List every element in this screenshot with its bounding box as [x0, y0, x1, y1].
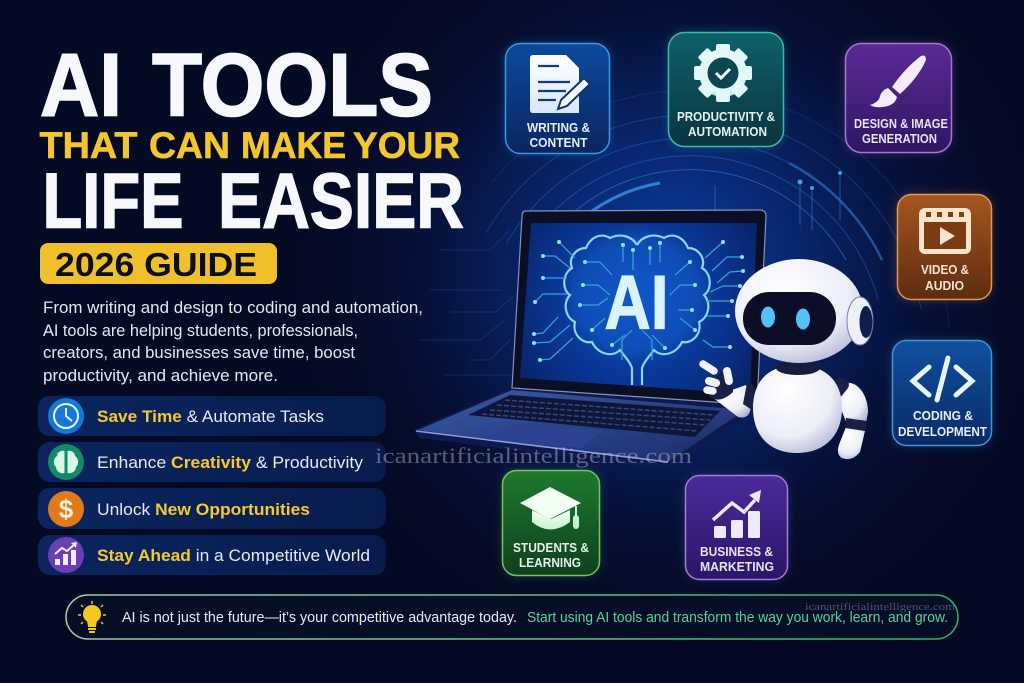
intro paragraph: productivity, and achieve more.: [43, 366, 278, 385]
icon: clock: [48, 398, 84, 434]
card: coding and development: [892, 340, 992, 446]
watermark: icanartificialintelligence.com: [375, 443, 692, 468]
robot pointing arm: [703, 364, 755, 418]
benefit row: new opportunities: [38, 488, 386, 529]
card: video and audio: AUDIO: [925, 278, 964, 293]
intro paragraph: AI tools are helping students, professionals,: [43, 321, 358, 340]
card: writing and content: [505, 43, 610, 154]
card: productivity and automation: AUTOMATION: [688, 124, 767, 139]
badge: 2026 guide: 2026 GUIDE: [55, 246, 257, 283]
card: students and learning: LEARNING: [519, 555, 581, 570]
bottom banner: AI is not just the future—it’s your competitive advantage today.: [122, 610, 517, 626]
title word: TOOLS: TOOLS: [152, 34, 433, 134]
card: business and marketing: MARKETING: [700, 559, 774, 574]
card: design and image generation: DESIGN & IMAGE: [854, 116, 948, 131]
title line: life easier: EASIER: [218, 156, 464, 244]
card: productivity and automation: [668, 32, 784, 147]
intro paragraph: creators, and businesses save time, boost: [43, 343, 355, 362]
brain circuit graphic: AI: [604, 260, 668, 346]
icon: document and pencil: [530, 55, 590, 113]
bottom banner: [66, 595, 958, 639]
card: students and learning: [502, 470, 600, 576]
benefit row: enhance creativity: [38, 442, 386, 482]
icon: dollar: $: [59, 494, 74, 524]
card: coding and development: DEVELOPMENT: [898, 424, 987, 439]
card: video and audio: VIDEO &: [921, 262, 969, 277]
robot body: [753, 361, 842, 453]
small watermark: icanartificialintelligence.com: [805, 601, 956, 613]
laptop screen: [512, 210, 766, 405]
icon: code brackets: [913, 358, 972, 400]
intro paragraph: [43, 298, 423, 385]
benefit row: new opportunities: Unlock New Opportunities: [97, 500, 310, 519]
card: writing and content: CONTENT: [530, 135, 588, 150]
title line: life easier: [42, 156, 464, 244]
card: coding and development: CODING &: [913, 408, 973, 423]
card: productivity and automation: PRODUCTIVITY &: [677, 109, 775, 124]
benefit row: save time: Save Time & Automate Tasks: [97, 407, 324, 426]
benefit row: stay ahead: [38, 535, 386, 575]
intro paragraph: From writing and design to coding and automation,: [43, 298, 423, 317]
laptop base: [414, 388, 757, 470]
brain circuit graphic: [532, 233, 745, 385]
card: writing and content: WRITING &: [527, 120, 590, 135]
icon: paint brush: [870, 56, 926, 107]
card: business and marketing: [685, 475, 788, 580]
icon: graduation cap: [520, 487, 581, 530]
title line: that can make your: YOUR: [353, 125, 460, 166]
card: students and learning: STUDENTS &: [513, 540, 589, 555]
title line: life easier: LIFE: [42, 156, 184, 244]
title line: that can make your: THAT: [40, 125, 138, 166]
title: [40, 34, 464, 244]
card: video and audio: [897, 194, 992, 300]
laptop: [414, 210, 766, 470]
benefit row: enhance creativity: Enhance Creativity & Productivity: [97, 453, 364, 472]
title line: that can make your: CAN: [149, 125, 230, 166]
robot head: [735, 259, 873, 363]
title line: that can make your: MAKE: [241, 125, 346, 166]
title line: AI TOOLS: AI: [40, 34, 122, 134]
card: design and image generation: GENERATION: [862, 131, 937, 146]
bottom banner: Start using AI tools and transform the way you work, learn, and grow.: [527, 610, 948, 626]
benefit row: stay ahead: Stay Ahead in a Competitive World: [97, 546, 370, 565]
icon: dollar: [48, 491, 84, 527]
robot: [703, 259, 873, 459]
card: design and image generation: [845, 43, 952, 153]
icon: brain: [48, 444, 84, 480]
card: business and marketing: BUSINESS &: [700, 544, 773, 559]
icon: gear with check: [694, 44, 752, 102]
icon: light bulb: [78, 601, 106, 632]
robot far arm: [830, 378, 868, 459]
title line: that can make your: [40, 125, 460, 166]
benefit row: save time: [38, 396, 386, 436]
icon: bar chart with arrow: [713, 490, 761, 538]
icon: growth chart: [48, 537, 84, 573]
icon: video player: [919, 208, 971, 254]
